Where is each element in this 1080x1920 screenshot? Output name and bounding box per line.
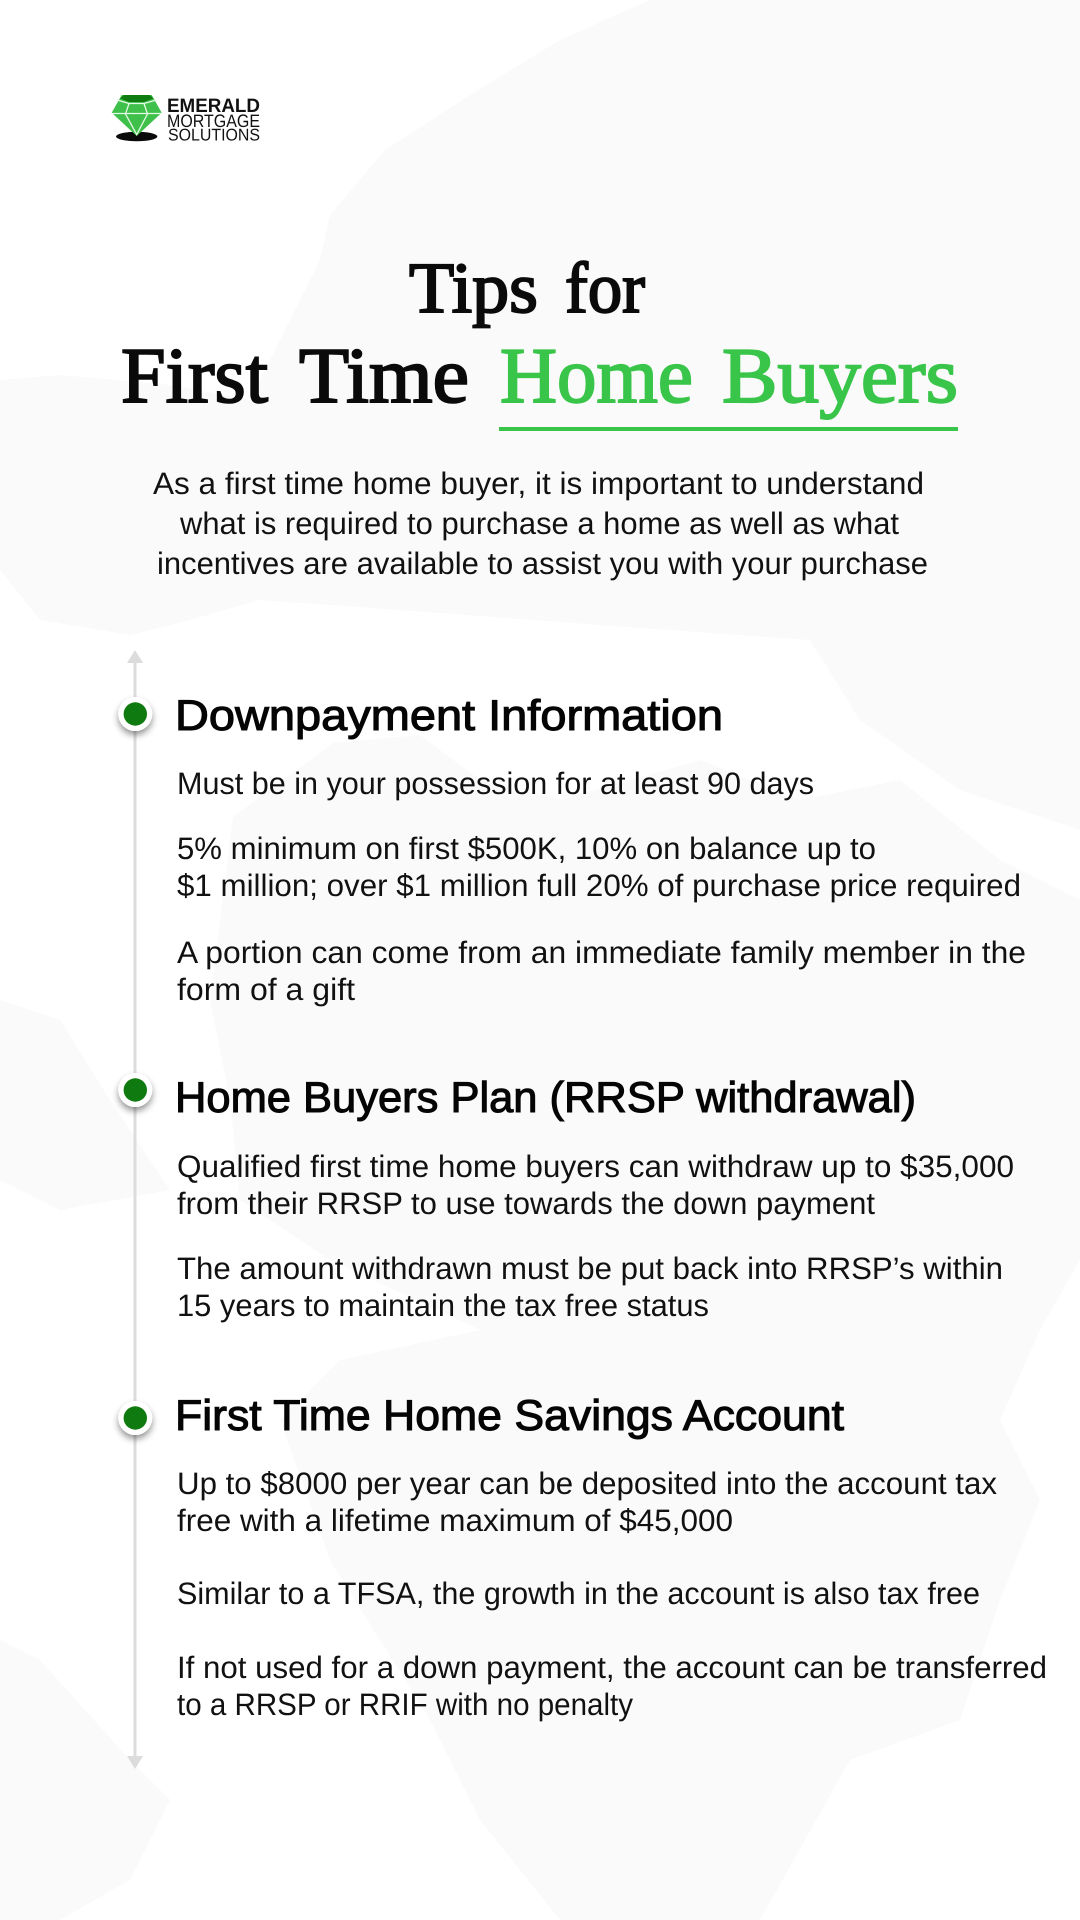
intro text: incentives are available to assist you with your purchase: [157, 546, 928, 581]
title: Time: [299, 333, 469, 420]
bullet text: Must be in your possession for at least 90 days: [177, 766, 814, 801]
bullet text: [177, 1466, 1047, 1722]
bullet text: from their RRSP to use towards the down payment: [177, 1186, 875, 1221]
logo wordmark: MORTGAGE: [167, 111, 260, 131]
bullet text: [177, 766, 1026, 1007]
title: Home: [500, 333, 693, 420]
intro text: As a first time home buyer, it is important to understand: [153, 466, 924, 501]
heading: First Time Home Savings Account: [175, 1392, 844, 1440]
logo wordmark: EMERALD: [167, 95, 260, 117]
heading: Downpayment Information: [175, 692, 723, 740]
bullet text: 15 years to maintain the tax free status: [177, 1288, 709, 1323]
bullet text: Similar to a TFSA, the growth in the account is also tax free: [177, 1576, 980, 1611]
bullet text: free with a lifetime maximum of $45,000: [177, 1503, 733, 1538]
timeline marker 3: [118, 1401, 152, 1435]
logo: [112, 95, 260, 144]
logo wordmark: SOLUTIONS: [168, 126, 260, 144]
timeline marker 1: [118, 697, 152, 731]
section: downpayment information: [175, 692, 1026, 1007]
intro text: [153, 466, 928, 581]
section: first time home savings account: [175, 1392, 1047, 1722]
bullet text: $1 million; over $1 million full 20% of purchase price required: [177, 868, 1021, 903]
bullet text: The amount withdrawn must be put back into RRSP’s within: [177, 1251, 1003, 1286]
title: [121, 248, 958, 420]
title: for: [565, 248, 645, 328]
logo wordmark: [167, 95, 260, 144]
icon: emerald gem: [112, 95, 162, 141]
bullet text: to a RRSP or RRIF with no penalty: [177, 1687, 633, 1722]
title: Buyers: [722, 333, 958, 420]
bullet text: 5% minimum on first $500K, 10% on balance up to: [177, 831, 876, 866]
bullet text: Qualified first time home buyers can withdraw up to $35,000: [177, 1149, 1014, 1184]
title: Tips: [409, 248, 538, 328]
timeline arrow: [127, 650, 143, 1769]
bullet text: Up to $8000 per year can be deposited into the account tax: [177, 1466, 997, 1501]
section: home buyers plan: [175, 1074, 1014, 1323]
heading: Home Buyers Plan (RRSP withdrawal): [175, 1074, 916, 1122]
bullet text: form of a gift: [177, 972, 355, 1007]
bullet text: A portion can come from an immediate family member in the: [177, 935, 1026, 970]
timeline marker 2: [118, 1073, 152, 1107]
bullet text: If not used for a down payment, the account can be transferred: [177, 1650, 1047, 1685]
title: First: [121, 333, 268, 420]
bullet text: [177, 1149, 1014, 1323]
title underline: [499, 427, 958, 431]
intro text: what is required to purchase a home as well as what: [179, 506, 899, 541]
